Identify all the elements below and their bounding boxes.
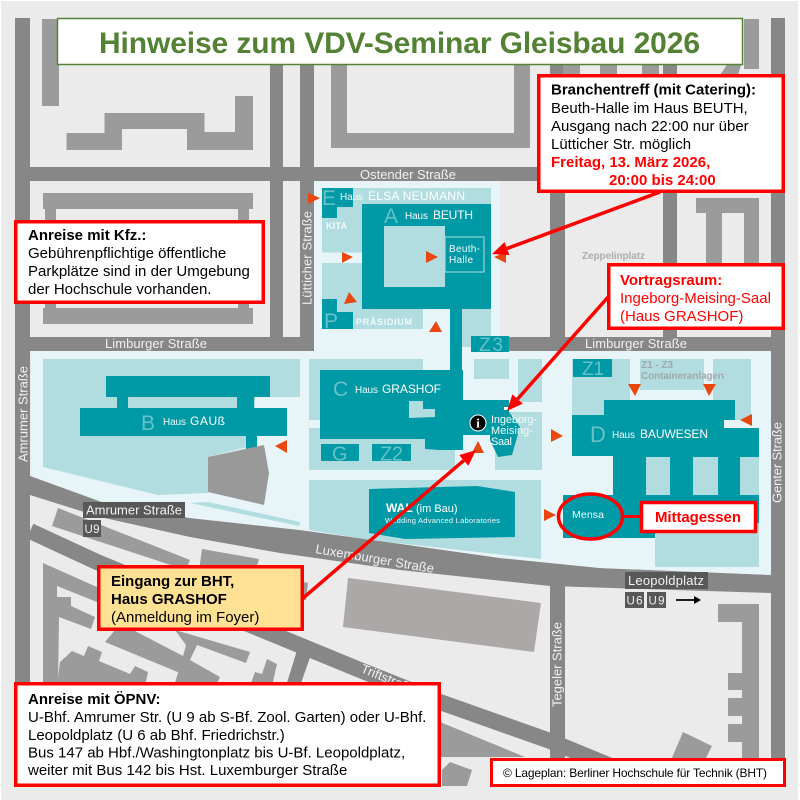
building: Haus Bauwesen and Mensa: Mensa — [572, 509, 604, 521]
building: Haus Beuth and Elsa Neumann: ELSA NEUMANN — [368, 189, 465, 203]
label: Z1 - Z3 Containeranlagen: Z1 - Z3 — [641, 360, 673, 371]
arrow: Eingang to Haus Grashof — [302, 450, 476, 599]
callout: Mensa ellipse and Mittagessen: Mittagessen — [655, 509, 741, 526]
street names: Luxemburger Straße — [314, 541, 435, 576]
title — [58, 18, 742, 64]
street names: Limburger Straße — [105, 336, 207, 351]
street names: Zeppelinplatz — [582, 251, 645, 262]
callout: Mensa ellipse and Mittagessen — [558, 494, 756, 539]
building: Haus Beuth and Elsa Neumann: KITA — [326, 221, 348, 231]
label: Ingeborg-Meising-Saal: Saal — [491, 436, 512, 448]
label: Haus Gauss — [141, 412, 225, 435]
street names: Genter Straße — [770, 422, 784, 503]
panel: Vortragsraum: (Haus GRASHOF) — [620, 308, 743, 325]
panel: Vortragsraum: Ingeborg-Meising-Saal — [620, 290, 771, 307]
campus grounds in light teal — [43, 188, 759, 567]
station label: Leopoldplatz U6 U9: U6 — [626, 596, 642, 608]
building G — [321, 444, 359, 466]
arrow: Vortragsraum to Ingeborg-Meising-Saal — [507, 296, 609, 411]
building Z2: Z2 — [380, 444, 403, 466]
street names: Lütticher Straße — [300, 211, 314, 305]
panel: copyright — [492, 760, 784, 786]
building: Haus Grashof with Ingeborg-Meising-Saal: C — [333, 378, 348, 401]
panel: Branchentreff: Freitag, 13. März 2026, — [551, 154, 710, 171]
label: Haus Gauss: B — [141, 412, 155, 435]
panel: Branchentreff: Ausgang nach 22:00 nur über — [551, 118, 749, 135]
building: WAL under construction — [369, 486, 515, 539]
panel: copyright: © Lageplan: Berliner Hochschule für Technik (BHT) — [503, 766, 767, 780]
building: Haus Gauss with surrounding grey annex — [80, 376, 287, 505]
building: large block south of Luxemburger Strasse — [343, 578, 541, 652]
station label: Leopoldplatz U6 U9 — [625, 572, 708, 608]
panel: Anreise mit OePNV: Leopoldplatz (U 6 ab Bhf. Friedrichstr.) — [28, 727, 285, 744]
building G: G — [332, 444, 348, 466]
street names: Limburger Straße — [585, 336, 687, 351]
street names: Tegeler Straße — [550, 622, 564, 707]
label: Haus Gauss: Haus — [163, 417, 186, 428]
panel: Branchentreff — [539, 76, 783, 191]
panel: Branchentreff: Beuth-Halle im Haus BEUTH, — [551, 100, 748, 117]
entrance markers — [275, 193, 752, 521]
panel: Branchentreff: Lütticher Str. möglich — [551, 136, 691, 153]
panel: Anreise mit OePNV: U-Bhf. Amrumer Str. (U 9 ab S-Bf. Zool. Garten) oder U-Bhf. — [28, 709, 426, 726]
arrow: toward Leopoldplatz — [676, 596, 701, 604]
panel: Anreise mit Kfz: Parkplätze sind in der Umgebung — [28, 263, 250, 280]
building: Haus Bauwesen and Mensa: Haus — [612, 430, 635, 441]
building: Haus Beuth and Elsa Neumann: E — [322, 187, 336, 210]
icon: information — [470, 415, 486, 431]
label: Ingeborg-Meising-Saal: Meising- — [491, 425, 533, 437]
panel: Eingang zur BHT: Eingang zur BHT, — [111, 573, 234, 590]
station label: Leopoldplatz U6 U9: U9 — [648, 596, 664, 608]
building: Haus Bauwesen and Mensa: D — [590, 422, 606, 447]
arrow: Branchentreff to Beuth-Halle — [492, 192, 660, 255]
container Z1: Z1 — [582, 359, 604, 380]
building: Haus Beuth and Elsa Neumann — [322, 187, 491, 372]
building: Haus Beuth and Elsa Neumann: A — [384, 205, 398, 228]
street names — [16, 167, 784, 707]
street names: Triftstraße — [359, 661, 419, 697]
Beuth-Halle — [445, 237, 484, 272]
street names: Ostender Straße — [360, 167, 456, 182]
building: Haus Beuth and Elsa Neumann: Haus — [340, 192, 363, 203]
container Z3: Z3 — [479, 335, 503, 356]
building: WAL under construction: Wedding Advanced Laboratories — [385, 516, 500, 525]
panel: Anreise mit Kfz: Anreise mit Kfz.: — [28, 227, 146, 244]
panel: Anreise mit OePNV: Anreise mit ÖPNV: — [28, 691, 161, 708]
panel: Anreise mit OePNV: weiter mit Bus 142 bis Hst. Luxemburger Straße — [27, 762, 347, 779]
building: Haus Beuth and Elsa Neumann: P — [324, 310, 338, 333]
container Z3 — [471, 335, 509, 356]
building: WAL under construction: WAL (im Bau) — [386, 501, 458, 515]
building: Haus Grashof with Ingeborg-Meising-Saal — [320, 370, 537, 457]
label: Ingeborg-Meising-Saal: Ingeborg- — [491, 414, 537, 426]
station label: Amrumer Strasse U9 — [83, 502, 185, 537]
panel: Anreise mit Kfz: Gebührenpflichtige öffentliche — [28, 245, 226, 262]
Beuth-Halle: Beuth- — [449, 244, 480, 255]
label: Z1 - Z3 Containeranlagen — [641, 360, 724, 382]
title: Hinweise zum VDV-Seminar Gleisbau 2026 — [99, 27, 700, 60]
street names: Amrumer Straße — [16, 366, 30, 462]
label: Z1 - Z3 Containeranlagen: Containeranlagen — [641, 371, 724, 382]
panel: Anreise mit Kfz — [16, 222, 263, 302]
building: Haus Bauwesen and Mensa: BAUWESEN — [640, 427, 708, 441]
panel: Vortragsraum — [609, 265, 783, 328]
station label: Amrumer Strasse U9: U9 — [84, 524, 100, 536]
panel: Eingang zur BHT: (Anmeldung im Foyer) — [111, 609, 259, 626]
building Z2 — [372, 444, 411, 466]
icon: information: i — [476, 416, 480, 430]
label: Haus Gauss: GAUß — [190, 414, 225, 428]
panel: Anreise mit OePNV: Bus 147 ab Hbf./Washingtonplatz bis U-Bf. Leopoldplatz, — [28, 744, 405, 762]
building: Haus Beuth and Elsa Neumann: PRÄSIDIUM — [356, 317, 412, 327]
container Z1 — [573, 359, 612, 380]
station label: Amrumer Strasse U9: Amrumer Straße — [86, 502, 182, 518]
station label: Leopoldplatz U6 U9: Leopoldplatz — [628, 573, 704, 588]
panel: Vortragsraum: Vortragsraum: — [620, 272, 722, 289]
building: Haus Beuth and Elsa Neumann: Haus — [405, 211, 428, 222]
panel: Branchentreff: Branchentreff (mit Catering): — [551, 82, 756, 98]
label: Ingeborg-Meising-Saal — [491, 414, 537, 448]
panel: Eingang zur BHT — [99, 567, 302, 629]
Beuth-Halle: Halle — [449, 255, 473, 266]
panel: Branchentreff: 20:00 bis 24:00 — [609, 172, 716, 189]
panel: Anreise mit Kfz: der Hochschule vorhanden. — [28, 281, 211, 298]
panel: Eingang zur BHT: Haus GRASHOF — [111, 591, 227, 608]
panel: Anreise mit OePNV — [16, 684, 439, 785]
building: Haus Grashof with Ingeborg-Meising-Saal: Haus — [355, 385, 378, 396]
building: Haus Grashof with Ingeborg-Meising-Saal: GRASHOF — [382, 382, 441, 396]
building: Haus Bauwesen and Mensa — [563, 400, 759, 538]
building: Haus Beuth and Elsa Neumann: BEUTH — [433, 208, 473, 222]
campus ground — [31, 181, 771, 575]
